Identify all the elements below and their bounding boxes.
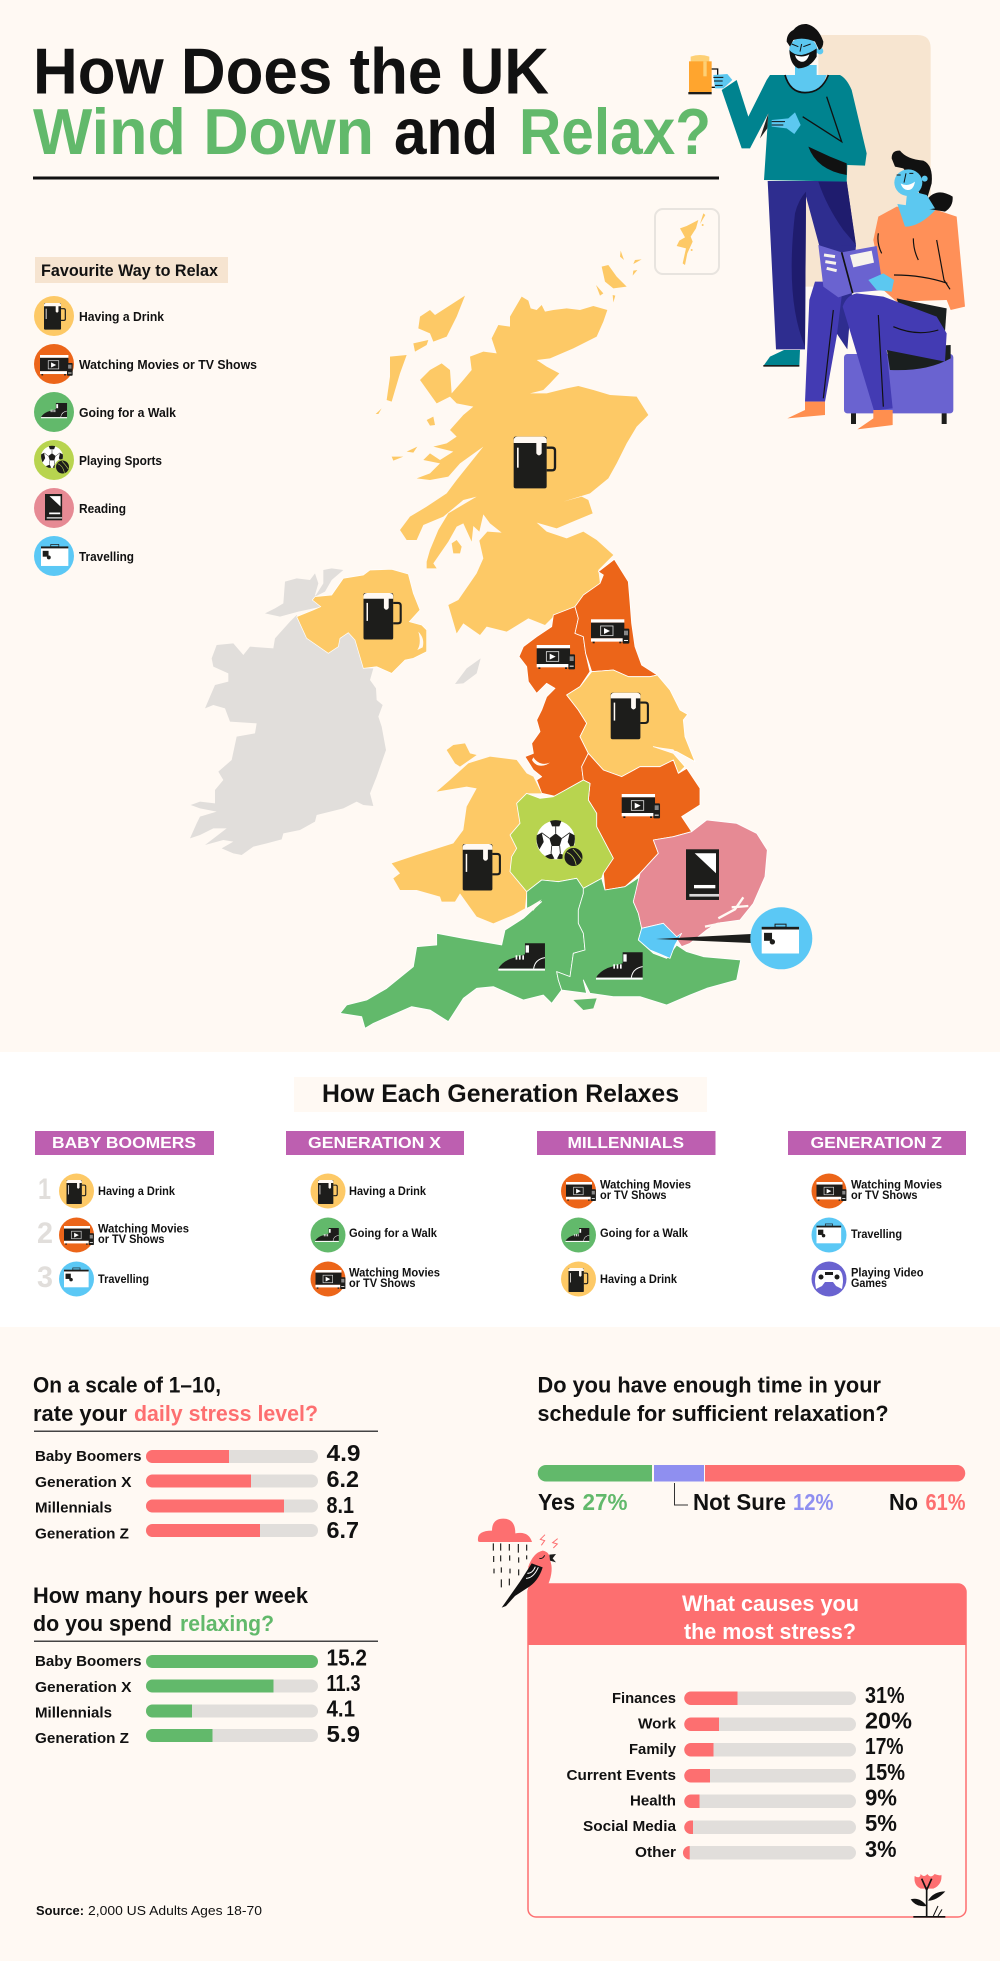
region: Anglesey: [447, 743, 477, 767]
panel: Generation X: Watching Movies: [349, 1268, 440, 1280]
panel: Millennials: Watching Movies: [600, 1180, 691, 1192]
source: Source:: [36, 1903, 84, 1918]
panel: Generation Z: Travelling: [851, 1229, 902, 1241]
panel: Millennials: MILLENNIALS: [568, 1135, 684, 1152]
heading: hours relaxing: How many hours per week: [33, 1583, 309, 1608]
panel: Baby Boomers: Watching Movies: [98, 1224, 189, 1236]
panel: Generation Z: Games: [851, 1278, 887, 1290]
chart: stress causes bars: [566, 1682, 912, 1862]
chart: stress level bars: 4.9: [326, 1440, 360, 1466]
region: North East: [575, 559, 657, 677]
heading: enough time: Do you have enough time in your: [538, 1372, 881, 1398]
region: South East: [557, 877, 741, 1005]
heading: enough time: [538, 1372, 888, 1426]
chart: stress causes bars: Finances: [612, 1691, 676, 1707]
panel: Baby Boomers: 1: [38, 1173, 51, 1206]
chart: stress causes bars: Health: [630, 1794, 676, 1810]
panel: Millennials: Having a Drink: [600, 1274, 678, 1286]
chart: yes / not sure / no stacked bar: 61%: [926, 1489, 966, 1515]
chart: stress causes bars: 15%: [865, 1759, 905, 1785]
chart: stress level bars: [35, 1440, 360, 1543]
chart: stress causes bars: 17%: [865, 1733, 904, 1759]
panel: Generation X: GENERATION X: [308, 1135, 442, 1152]
icon: TV, North East: [591, 619, 629, 644]
panel: Generation Z: or TV Shows: [851, 1190, 918, 1202]
heading: daily stress level: rate your: [33, 1401, 127, 1426]
chart: relaxing hours bars: 11.3: [326, 1670, 360, 1696]
legend: going for a walk: [34, 392, 177, 432]
panel: Generation Z: GENERATION Z: [810, 1135, 943, 1152]
region: West Midlands: [510, 780, 613, 892]
title: Wind Down: [33, 95, 374, 168]
chart: relaxing hours bars: Generation X: [35, 1680, 132, 1696]
region: Isle of Man: [455, 658, 481, 684]
legend: travelling: Travelling: [79, 549, 134, 564]
chart: stress level bars: Generation Z: [35, 1526, 129, 1542]
icon: TV, East Midlands: [622, 794, 660, 818]
legend: having a drink: Having a Drink: [79, 309, 165, 324]
chart: stress level bars: 6.2: [326, 1466, 359, 1492]
title: [33, 34, 711, 168]
chart: relaxing hours bars: Baby Boomers: [35, 1654, 142, 1670]
chart: stress causes bars: Social Media: [583, 1819, 677, 1835]
chart: stress causes bars: 9%: [865, 1784, 897, 1810]
heading: hours relaxing: do you spend: [33, 1611, 172, 1636]
heading: daily stress level: [33, 1372, 318, 1426]
icon: rain cloud: [478, 1519, 532, 1587]
legend: reading: [34, 488, 126, 528]
panel: generations background: [0, 1052, 1000, 1327]
icon: boot, South East: [596, 952, 643, 980]
icon: football: [536, 820, 575, 859]
icon: stressed bird: [502, 1535, 558, 1608]
panel: Generation X: or TV Shows: [349, 1278, 416, 1290]
chart: relaxing hours bars: 5.9: [326, 1721, 360, 1747]
chart: stress causes bars: 31%: [865, 1682, 904, 1708]
panel: Generation Z: Playing Video: [851, 1268, 924, 1280]
legend: watching movies: Watching Movies or TV Shows: [79, 357, 257, 372]
map: Scotland: [376, 251, 648, 635]
chart: relaxing hours bars: Generation Z: [35, 1731, 129, 1747]
icon: drink, Northern Ireland: [364, 593, 401, 640]
chart: stress causes bars: 20%: [865, 1708, 912, 1734]
map icons: [364, 593, 719, 980]
region: Wales: [392, 757, 542, 923]
panel: Baby Boomers: Having a Drink: [98, 1186, 176, 1198]
icon: boot, South West: [498, 943, 545, 971]
region: North West: [519, 607, 590, 797]
callout: London travelling: [656, 907, 812, 969]
chart: stress level bars: Millennials: [35, 1500, 112, 1516]
panel: Baby Boomers: [35, 1131, 214, 1296]
illustration: man and woman relaxing: [688, 24, 965, 429]
panel: Generation Z: [788, 1131, 966, 1296]
region: East Midlands: [582, 753, 700, 890]
panel: Generation X: Having a Drink: [349, 1186, 427, 1198]
panel: Generation Z: Watching Movies: [851, 1180, 942, 1192]
map: Republic of Ireland: [190, 568, 386, 855]
chart: yes / not sure / no stacked bar: Yes: [538, 1489, 575, 1515]
chart: stress causes bars: Current Events: [566, 1768, 676, 1784]
map: England and Wales regions: [340, 559, 767, 1028]
legend: reading: Reading: [79, 501, 126, 516]
heading: enough time: schedule for sufficient relaxation?: [538, 1401, 888, 1426]
panel: what causes stress: What causes you: [682, 1591, 859, 1616]
icon: drink, Yorkshire: [611, 693, 648, 739]
legend: playing sports: Playing Sports: [79, 453, 162, 468]
chart: stress level bars: Generation X: [35, 1475, 132, 1491]
icon: TV, North West: [537, 645, 575, 669]
map: Northern Ireland: [297, 569, 427, 673]
heading: how each generation relaxes: [294, 1077, 707, 1112]
heading: hours relaxing: relaxing?: [180, 1611, 274, 1636]
chart: yes / not sure / no stacked bar: Not Sure: [693, 1489, 786, 1515]
heading: how each generation relaxes: How Each Generation Relaxes: [322, 1080, 679, 1108]
chart: stress causes bars: 5%: [865, 1810, 897, 1836]
region: London: [638, 923, 682, 958]
panel: Millennials: [537, 1131, 716, 1296]
panel: what causes stress: [528, 1584, 966, 1917]
title: and: [394, 95, 498, 168]
icon: woman on stool: [787, 151, 965, 429]
legend: watching movies: [34, 344, 257, 384]
panel: Baby Boomers: or TV Shows: [98, 1234, 164, 1246]
region: Yorkshire: [567, 670, 695, 777]
chart: yes / not sure / no stacked bar: 12%: [793, 1489, 834, 1515]
chart: yes / not sure / no stacked bar: No: [889, 1489, 918, 1515]
panel: Generation X: Going for a Walk: [349, 1228, 438, 1240]
chart: stress causes bars: Other: [635, 1845, 676, 1861]
region: East of England: [633, 820, 767, 947]
chart: yes / not sure / no stacked bar: 27%: [582, 1489, 628, 1515]
chart: stress causes bars: Family: [629, 1742, 676, 1758]
legend: travelling: [34, 536, 134, 576]
legend heading: [35, 257, 228, 283]
heading: daily stress level: On a scale of 1–10,: [33, 1372, 221, 1398]
legend: having a drink: [34, 296, 165, 336]
region: Isle of Wight: [573, 998, 597, 1010]
icon: man: [688, 24, 867, 367]
panel: Baby Boomers: BABY BOOMERS: [52, 1135, 196, 1152]
panel: Baby Boomers: 3: [37, 1261, 53, 1294]
title: Relax?: [519, 95, 711, 168]
heading: daily stress level: daily stress level?: [134, 1401, 318, 1426]
region: South West: [340, 878, 585, 1028]
chart: yes / not sure / no stacked bar: [538, 1465, 966, 1515]
source: 2,000 US Adults Ages 18-70: [88, 1903, 262, 1918]
panel: Baby Boomers: Travelling: [98, 1274, 149, 1286]
chart: stress level bars: 6.7: [326, 1517, 359, 1543]
icon: tennis ball: [563, 846, 584, 868]
panel: Baby Boomers: 2: [37, 1217, 53, 1250]
panel: Generation X: [286, 1131, 464, 1296]
icon: flower: [911, 1874, 945, 1918]
heading: hours relaxing: [33, 1583, 309, 1636]
chart: relaxing hours bars: Millennials: [35, 1706, 112, 1722]
chart: relaxing hours bars: [35, 1644, 367, 1747]
legend heading: Favourite Way to Relax: [41, 262, 219, 280]
legend: playing sports: [34, 440, 162, 480]
icon: drink, Wales: [463, 844, 500, 890]
panel: Millennials: Going for a Walk: [600, 1228, 689, 1240]
title: How Does the UK: [33, 34, 549, 108]
panel: Shetland inset: [655, 209, 719, 274]
icon: book, East of England: [686, 849, 719, 900]
chart: stress level bars: Baby Boomers: [35, 1449, 142, 1465]
chart: stress causes bars: 3%: [865, 1836, 896, 1862]
chart: relaxing hours bars: 15.2: [326, 1644, 367, 1670]
panel: what causes stress: the most stress?: [684, 1619, 856, 1644]
panel: Millennials: or TV Shows: [600, 1190, 666, 1202]
chart: stress causes bars: Work: [638, 1716, 677, 1732]
chart: stress level bars: 8.1: [326, 1492, 354, 1518]
legend: going for a walk: Going for a Walk: [79, 405, 177, 420]
chart: relaxing hours bars: 4.1: [326, 1696, 355, 1722]
